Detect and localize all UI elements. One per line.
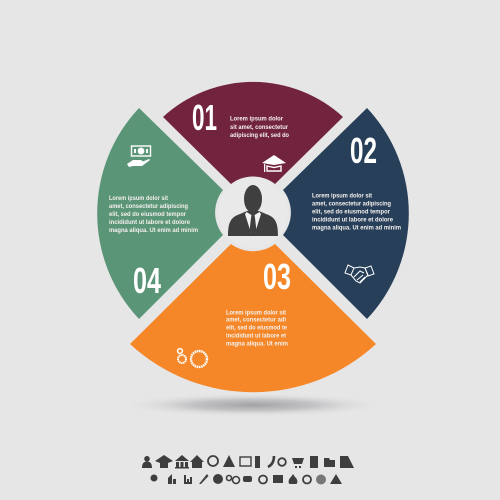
icon: bank [175,455,189,468]
icon: small gears [226,476,240,484]
icon: seal [208,456,218,466]
icon: graduation cap [262,155,286,172]
number 03: 03 [263,256,291,297]
icon: shopping cart [292,458,304,468]
icon: handshake [345,265,374,283]
icon: wrench disc [213,474,223,484]
number 01: 01 [192,97,217,138]
panel: 02 navy segment [283,108,409,319]
icon: folder [324,458,335,467]
text block 04: amet, consectetur adipiscing [109,203,188,210]
text block 04: Lorem ipsum dolor sit [109,195,169,202]
text block 04: incididunt ut labore et dolore [109,219,190,226]
icon: handshake small [243,476,252,482]
panel: 04 green segment [97,108,223,319]
text block 02: Lorem ipsum dolor sit [312,192,373,199]
text block 01 [230,116,289,139]
text block 02: magna aliqua. Ut enim ad minim [312,224,401,231]
icon: warning triangle [330,474,342,484]
text block 04: magna aliqua. Ut enim ad minim [109,227,198,234]
icon row 2 [150,474,342,484]
icon: bar chart plant [168,474,176,484]
icon: phone handset [255,456,260,468]
icon: trash bin [310,456,318,468]
icon row 1 [142,455,354,468]
text block 04: elit, sed do eiusmod tempor [109,211,186,218]
icon: money in hand [127,146,150,167]
icon: speech monitor [273,475,283,483]
icon: at sign [278,458,286,466]
icon: bulb [150,474,158,482]
text block 02: elit, sed do eiusmod tempor [312,208,390,215]
icon: house [190,455,204,468]
icon: coin [316,474,326,484]
icon: pencil [199,474,208,484]
text block 01: adipiscing elit, sed do [230,132,289,139]
icon: mortarboard [155,455,173,468]
text block 02: amet, consectetur adipiscing [312,200,391,207]
panel: 01 maroon segment [163,82,343,184]
icon: money bag [289,474,297,484]
icon: books [340,456,354,468]
icon: telephone [268,456,274,467]
text block 01: sit amet, consectetur [230,124,288,131]
number 04: 04 [133,260,161,301]
number 02: 02 [350,130,377,171]
icon: clock [303,476,311,484]
drop shadow under wheel [118,393,388,417]
text block 03: magna aliqua. Ut enim [226,340,288,348]
icon: alarm clock [259,476,267,484]
panel: 03 orange segment [130,244,376,392]
icon: recycle [223,455,235,467]
text block 03: incididunt ut labore et [226,332,287,340]
icon: bar chart [184,475,192,484]
text block 02 [312,192,401,231]
icon: person [142,456,152,468]
text block 02: incididunt ut labore et dolore [312,216,393,223]
text block 03: elit, sed do eiusmod te [226,324,287,332]
text block 03: amet, consectetur adi [226,317,286,324]
icon: businessman silhouette [228,185,278,236]
text block 01: Lorem ipsum dolor [230,116,283,122]
center disc with person [218,178,288,248]
text block 03: Lorem ipsum dolor sit [226,309,287,316]
icon: mail [240,457,251,466]
text block 04 [109,195,198,234]
text block 03 [226,309,288,348]
icon: gears [178,349,207,367]
